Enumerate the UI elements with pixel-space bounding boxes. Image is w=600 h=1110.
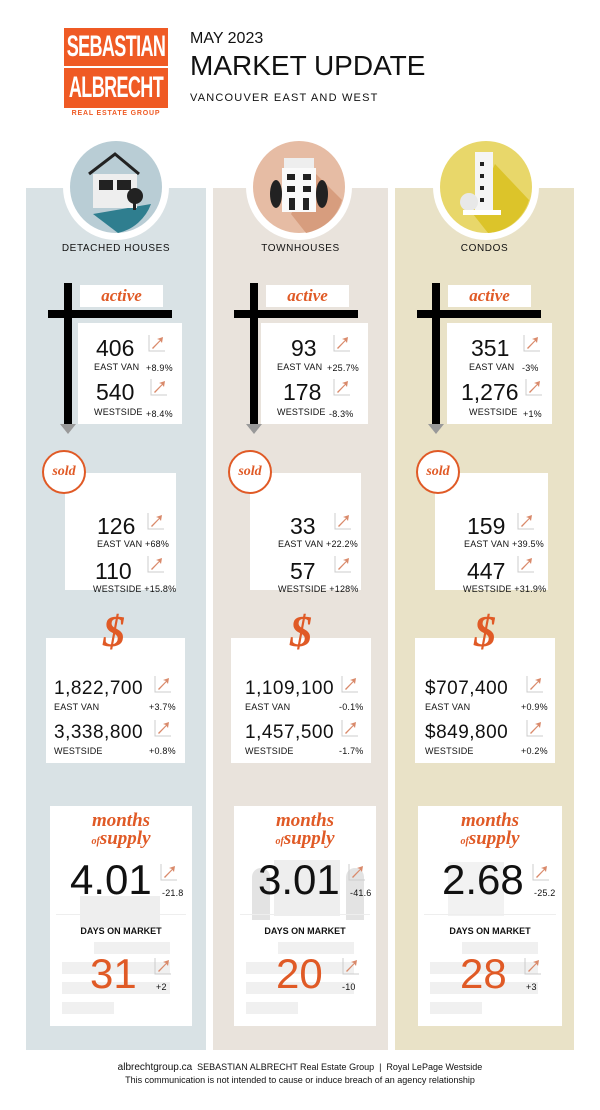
price box: +0.9% [521, 702, 548, 712]
price box: WESTSIDE [425, 746, 474, 756]
sold box: WESTSIDE +15.8% [93, 584, 176, 594]
price box: EAST VAN [54, 702, 99, 712]
active box: EAST VAN [277, 362, 322, 372]
sold box: WESTSIDE +31.9% [463, 584, 546, 594]
sold box: EAST VAN +39.5% [464, 539, 544, 549]
sold box: 447 [467, 558, 505, 584]
sign post [432, 283, 440, 428]
months of supply box: months [461, 810, 519, 831]
active box: WESTSIDE [277, 407, 326, 417]
price box: WESTSIDE [245, 746, 294, 756]
months of supply box: -10 [342, 982, 356, 992]
logo: SEBASTIAN [67, 30, 165, 63]
label: DETACHED HOUSES [62, 243, 170, 254]
sold box [250, 473, 361, 590]
footer [118, 1062, 482, 1085]
months of supply box [418, 806, 562, 1026]
months of supply box: -21.8 [162, 888, 184, 898]
price box: 1,822,700 [54, 678, 143, 699]
active box: +1% [523, 409, 542, 419]
active box: +25.7% [327, 363, 359, 373]
price box: +0.8% [149, 746, 176, 756]
active label: active [469, 286, 510, 305]
icon: condo circle [433, 141, 539, 240]
active box: EAST VAN [94, 362, 139, 372]
logo: REAL ESTATE GROUP [72, 110, 160, 117]
sold box [435, 473, 548, 590]
active box: 178 [283, 379, 321, 405]
active box: 351 [471, 335, 509, 361]
active box [447, 323, 552, 424]
active label [448, 285, 531, 307]
active box: 406 [96, 335, 134, 361]
months of supply box [234, 806, 376, 1026]
logo [64, 28, 168, 117]
price box: -1.7% [339, 746, 364, 756]
price box: EAST VAN [425, 702, 470, 712]
months of supply box: 2.68 [442, 856, 524, 903]
label: CONDOS [461, 243, 508, 254]
dollar icon: $ [103, 607, 125, 656]
sold box: 110 [95, 558, 132, 584]
sold box: 159 [467, 513, 505, 539]
months of supply box [50, 806, 192, 1026]
price box: +3.7% [149, 702, 176, 712]
sold badge [228, 450, 272, 494]
active box: 93 [291, 335, 317, 361]
sold box: EAST VAN +68% [97, 539, 169, 549]
sold box: 33 [290, 513, 316, 539]
sold badge [416, 450, 460, 494]
active label: active [101, 286, 142, 305]
months of supply box: DAYS ON MARKET [449, 926, 531, 936]
active box [78, 323, 182, 424]
months of supply box: 31 [90, 950, 137, 997]
months of supply box: ofsupply [91, 828, 151, 849]
logo: ALBRECHT [69, 71, 163, 104]
price box [231, 638, 371, 763]
months of supply box: 28 [460, 950, 507, 997]
months of supply box: +2 [156, 982, 167, 992]
months of supply box: 3.01 [258, 856, 340, 903]
active label [266, 285, 349, 307]
price box [46, 638, 185, 763]
footer: albrechtgroup.ca SEBASTIAN ALBRECHT Real Estate Group | Royal LePage Westside [118, 1062, 482, 1073]
months of supply box: -41.6 [350, 888, 372, 898]
active box: +8.4% [146, 409, 173, 419]
sold badge: sold [238, 464, 262, 479]
sold box [65, 473, 176, 590]
active box: WESTSIDE [94, 407, 143, 417]
active box: EAST VAN [469, 362, 514, 372]
months of supply box: 20 [276, 950, 323, 997]
panel: detached houses [26, 188, 206, 1050]
months of supply box: months [276, 810, 334, 831]
dollar icon: $ [474, 607, 496, 656]
sold badge: sold [426, 464, 450, 479]
sold badge [42, 450, 86, 494]
months of supply box: -25.2 [534, 888, 556, 898]
active box: WESTSIDE [469, 407, 518, 417]
active label [80, 285, 163, 307]
price box: 1,457,500 [245, 722, 334, 743]
months of supply box: 4.01 [70, 856, 152, 903]
footer: This communication is not intended to cause or induce breach of an agency relationship [125, 1075, 475, 1085]
months of supply box: DAYS ON MARKET [80, 926, 162, 936]
active box [261, 323, 368, 424]
active box: -8.3% [329, 409, 354, 419]
sold box: 126 [97, 513, 135, 539]
price box [415, 638, 555, 763]
panel: townhouses [213, 188, 388, 1050]
price box: $849,800 [425, 722, 508, 743]
price box: 1,109,100 [245, 678, 334, 699]
sold badge: sold [52, 464, 76, 479]
active box: -3% [522, 363, 539, 373]
title: VANCOUVER EAST AND WEST [190, 92, 379, 104]
panel: condos [395, 188, 574, 1050]
sign post [250, 283, 258, 428]
price box: WESTSIDE [54, 746, 103, 756]
dollar icon: $ [290, 607, 312, 656]
months of supply box: ofsupply [275, 828, 335, 849]
sold box: WESTSIDE +128% [278, 584, 359, 594]
label: TOWNHOUSES [261, 243, 340, 254]
sign post [64, 283, 72, 428]
months of supply box: months [92, 810, 150, 831]
title: MAY 2023 [190, 30, 263, 47]
title [190, 30, 425, 104]
price box: -0.1% [339, 702, 364, 712]
active box: +8.9% [146, 363, 173, 373]
active label: active [287, 286, 328, 305]
months of supply box: +3 [526, 982, 537, 992]
title: MARKET UPDATE [190, 50, 425, 81]
price box: EAST VAN [245, 702, 290, 712]
months of supply box: DAYS ON MARKET [264, 926, 346, 936]
active box: 1,276 [461, 379, 519, 405]
icon: townhouse circle [246, 141, 352, 240]
sold box: EAST VAN +22.2% [278, 539, 358, 549]
price box: $707,400 [425, 678, 508, 699]
months of supply box: ofsupply [460, 828, 520, 849]
price box: +0.2% [521, 746, 548, 756]
icon: detached house circle [63, 141, 169, 240]
active box: 540 [96, 379, 134, 405]
sold box: 57 [290, 558, 316, 584]
price box: 3,338,800 [54, 722, 143, 743]
